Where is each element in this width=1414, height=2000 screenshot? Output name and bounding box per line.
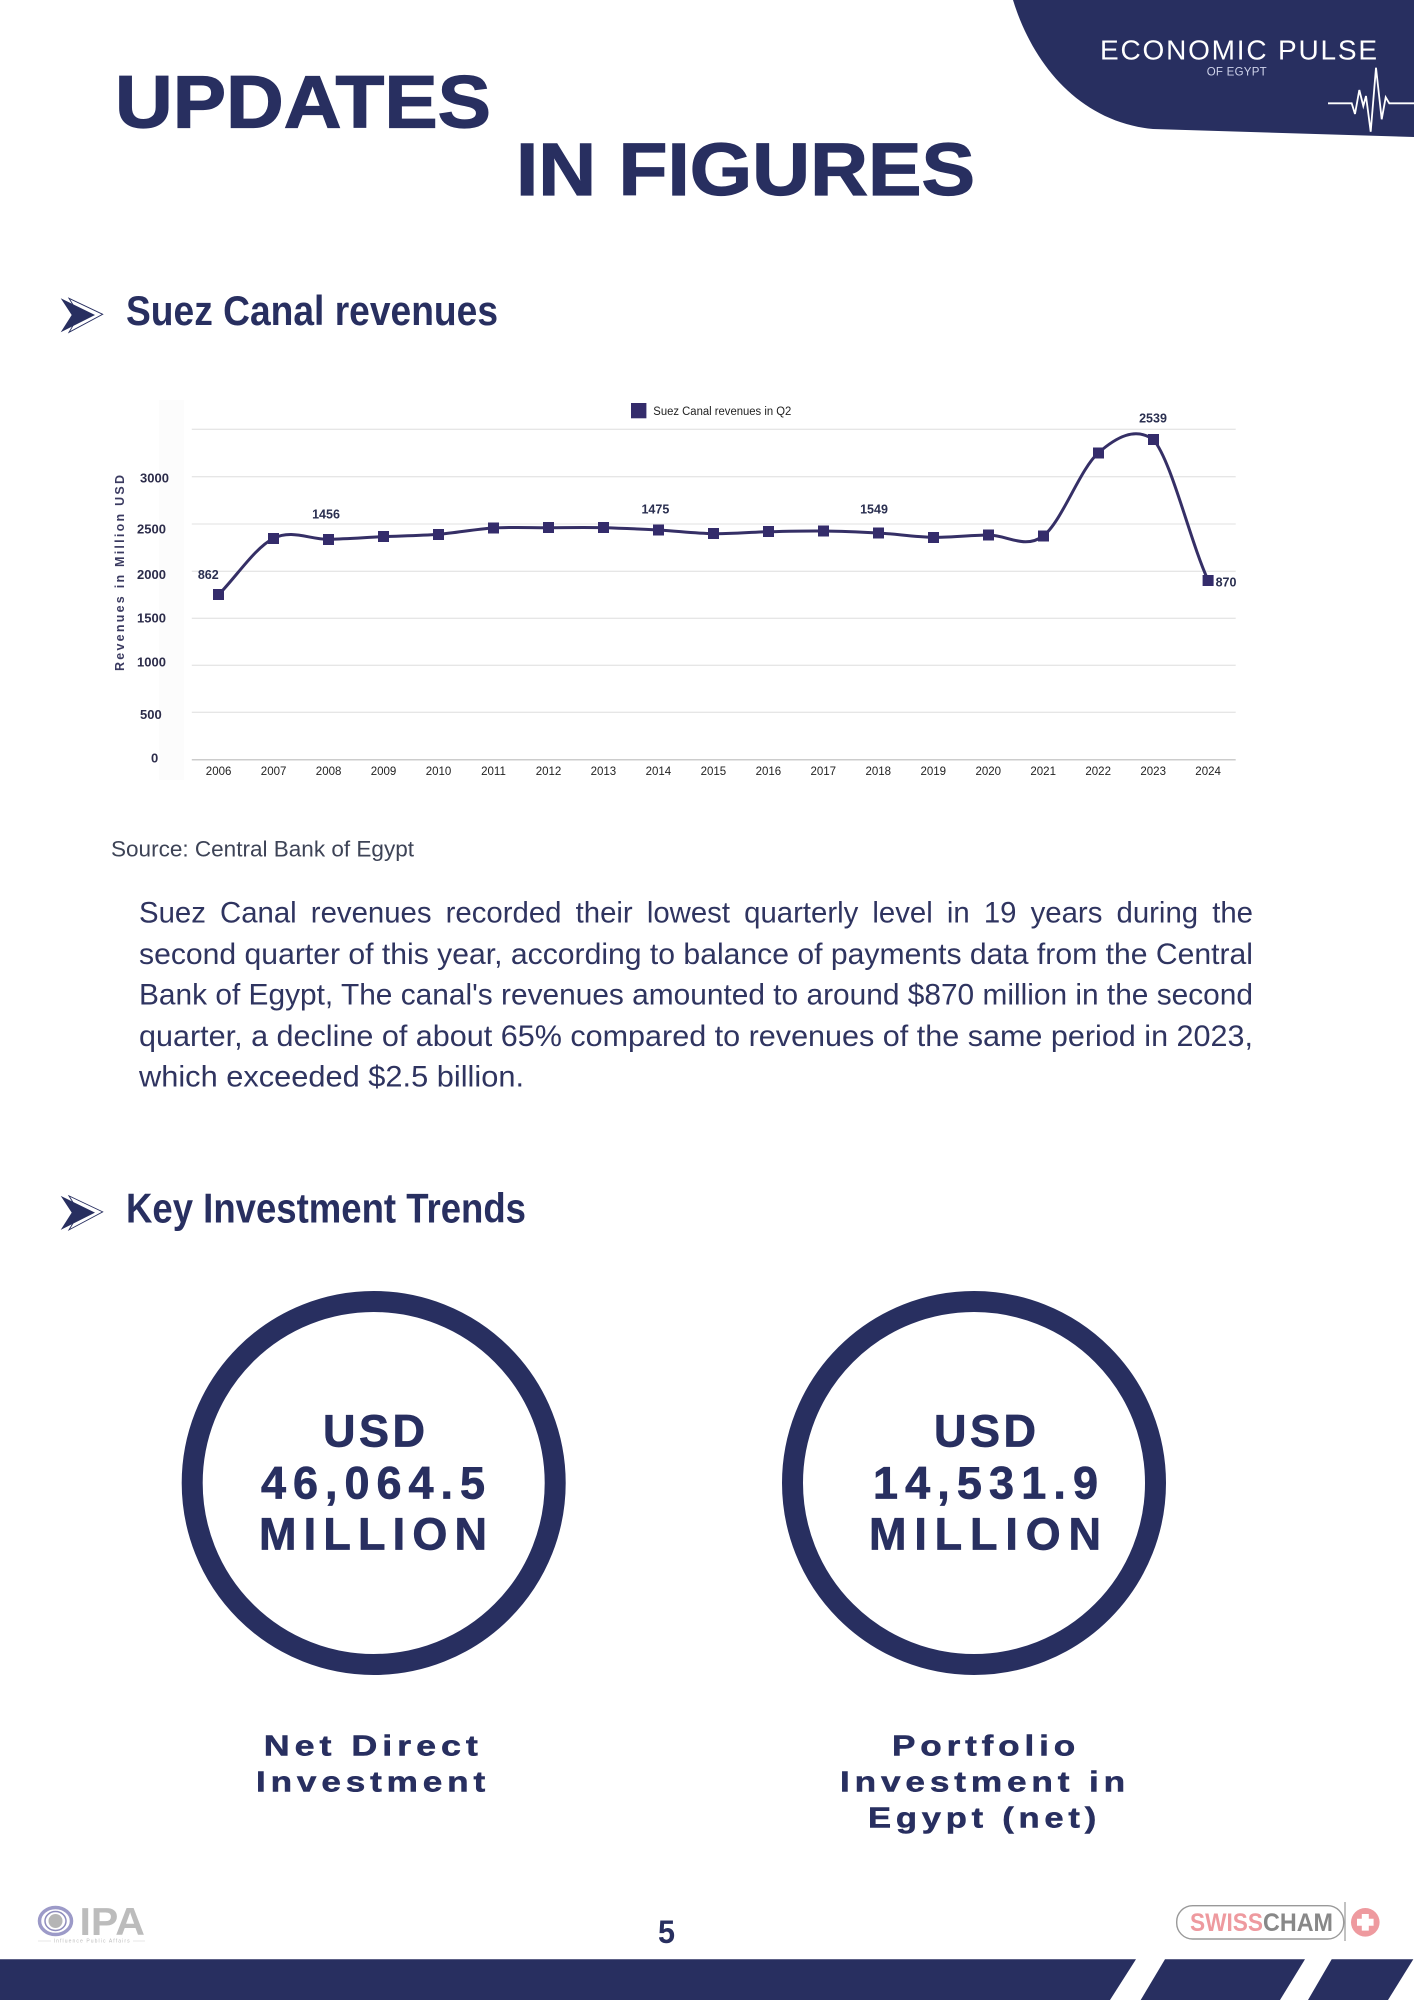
y axis labels: 2500 bbox=[137, 522, 166, 536]
x axis labels: 2016 bbox=[756, 766, 781, 778]
data labels bbox=[198, 412, 1236, 590]
header banner bbox=[1013, 0, 1414, 137]
x axis labels: 2020 bbox=[976, 766, 1001, 778]
x axis labels: 2011 bbox=[481, 766, 506, 778]
title: UPDATES bbox=[115, 61, 491, 144]
page number: 5 bbox=[658, 1914, 675, 1950]
paragraph: second quarter of this year, according to balance of payments data from the Central bbox=[139, 938, 1253, 971]
stat circle: portfolio investment: USD bbox=[934, 1406, 1036, 1457]
title bbox=[115, 61, 975, 211]
paragraph: which exceeded $2.5 billion. bbox=[138, 1061, 524, 1094]
x axis labels: 2006 bbox=[206, 766, 231, 778]
paragraph: Bank of Egypt, The canal's revenues amounted to around $870 million in the second bbox=[139, 979, 1253, 1012]
y axis labels: 1500 bbox=[137, 610, 166, 626]
x axis labels: 2009 bbox=[371, 766, 396, 778]
footer band bbox=[0, 1959, 1413, 2000]
x axis labels: 2019 bbox=[921, 766, 946, 778]
line chart: Suez Canal revenues in Q2 bbox=[113, 400, 1236, 780]
title: IN FIGURES bbox=[516, 128, 975, 211]
section heading: Suez Canal revenues: Suez Canal revenues bbox=[126, 287, 498, 334]
logo: IPA bbox=[38, 1901, 145, 1944]
x axis labels: 2023 bbox=[1140, 766, 1166, 778]
y axis labels: 2000 bbox=[137, 567, 166, 582]
stat circle: portfolio investment: 14,531.9 bbox=[873, 1457, 1098, 1508]
logo: SwissCham bbox=[1177, 1902, 1380, 1941]
label: net direct investment bbox=[256, 1731, 490, 1799]
paragraph: Suez Canal revenues recorded their lowest quarterly level in 19 years during the bbox=[139, 897, 1253, 930]
x axis labels: 2022 bbox=[1085, 766, 1111, 778]
data labels: 862 bbox=[198, 568, 219, 582]
data markers bbox=[213, 434, 1214, 600]
x axis labels: 2018 bbox=[866, 766, 891, 778]
stat circle: net direct investment bbox=[192, 1302, 555, 1664]
label: net direct investment: Net Direct bbox=[264, 1731, 483, 1763]
x axis labels: 2017 bbox=[811, 766, 836, 778]
data labels: 2539 bbox=[1139, 412, 1167, 426]
section heading: Key Investment Trends: Key Investment Trends bbox=[126, 1185, 526, 1232]
data labels: 870 bbox=[1216, 576, 1236, 590]
label: portfolio investment bbox=[840, 1731, 1130, 1835]
y axis labels: 1000 bbox=[137, 654, 166, 670]
header banner: OF EGYPT bbox=[1207, 66, 1267, 78]
x axis labels: 2008 bbox=[316, 766, 341, 778]
x axis labels: 2007 bbox=[261, 766, 286, 778]
data labels: 1549 bbox=[860, 502, 888, 516]
legend bbox=[631, 403, 791, 418]
legend: Suez Canal revenues in Q2 bbox=[653, 406, 791, 418]
y axis labels: 0 bbox=[151, 750, 158, 766]
source note: Source: Central Bank of Egypt bbox=[111, 837, 414, 862]
logo: IPA: Influence Public Affairs bbox=[54, 1938, 130, 1944]
x axis labels: 2024 bbox=[1195, 766, 1221, 778]
y axis title: Revenues in Million USD bbox=[113, 475, 127, 671]
label: net direct investment: Investment bbox=[256, 1767, 490, 1799]
stat circle: net direct investment: 46,064.5 bbox=[261, 1457, 485, 1508]
label: portfolio investment: Portfolio bbox=[892, 1731, 1080, 1763]
stat circle: portfolio investment bbox=[792, 1302, 1156, 1664]
revenue line bbox=[219, 434, 1208, 595]
stat circle: net direct investment: USD bbox=[323, 1406, 425, 1457]
logo: SwissCham: SWISS bbox=[1190, 1909, 1263, 1937]
label: portfolio investment: Egypt (net) bbox=[868, 1803, 1101, 1835]
x axis labels bbox=[206, 766, 1221, 778]
data labels: 1475 bbox=[641, 502, 669, 516]
data labels: 1456 bbox=[312, 508, 340, 522]
y axis labels bbox=[137, 470, 169, 766]
y axis labels: 3000 bbox=[140, 470, 169, 486]
x axis labels: 2010 bbox=[426, 766, 451, 778]
x axis labels: 2015 bbox=[701, 766, 726, 778]
x axis labels: 2021 bbox=[1030, 766, 1056, 778]
paragraph bbox=[138, 897, 1253, 1094]
x axis labels: 2014 bbox=[646, 766, 672, 778]
paragraph: quarter, a decline of about 65% compared to revenues of the same period in 2023, bbox=[139, 1020, 1253, 1053]
stat circle: portfolio investment: MILLION bbox=[869, 1508, 1101, 1559]
x axis labels: 2012 bbox=[536, 766, 561, 778]
logo: IPA: IPA bbox=[80, 1901, 145, 1944]
header banner: ECONOMIC PULSE bbox=[1100, 34, 1377, 65]
x axis labels: 2013 bbox=[591, 766, 616, 778]
stat circle: net direct investment: MILLION bbox=[259, 1508, 487, 1559]
y axis labels: 500 bbox=[140, 707, 162, 722]
logo: SwissCham: CHAM bbox=[1263, 1909, 1333, 1937]
label: portfolio investment: Investment in bbox=[840, 1767, 1130, 1799]
